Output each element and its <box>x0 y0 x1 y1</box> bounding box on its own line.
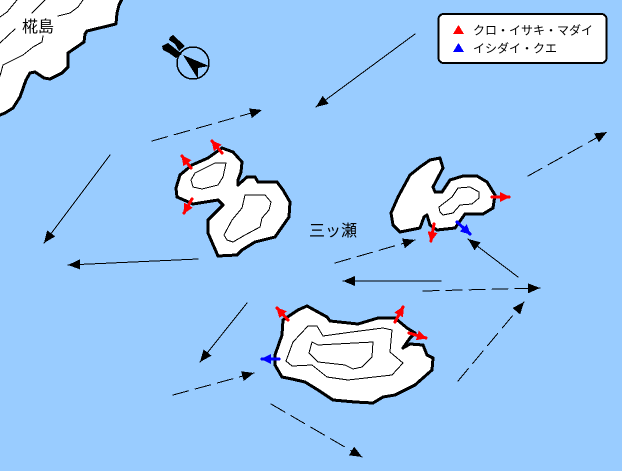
island: north-west <box>176 148 290 256</box>
legend text: red species: クロ・イサキ・マダイ <box>473 22 593 38</box>
icon: red triangle <box>453 25 464 34</box>
solid current arrows <box>44 34 518 362</box>
label: 三ッ瀬: 三ッ瀬 <box>309 222 357 240</box>
land: Kabashima <box>0 0 123 117</box>
icon: north compass with ship <box>162 35 209 79</box>
legend <box>438 14 606 63</box>
island: south <box>275 306 433 403</box>
legend text: blue species: イシダイ・クエ <box>473 40 557 56</box>
icon: blue triangle <box>453 43 464 52</box>
red fishing-spot arrows <box>182 141 509 338</box>
blue fishing-spot arrows <box>262 222 470 359</box>
label: 椛島: 椛島 <box>22 18 54 36</box>
island: north-east <box>391 158 495 232</box>
dashed current arrows <box>152 110 607 457</box>
